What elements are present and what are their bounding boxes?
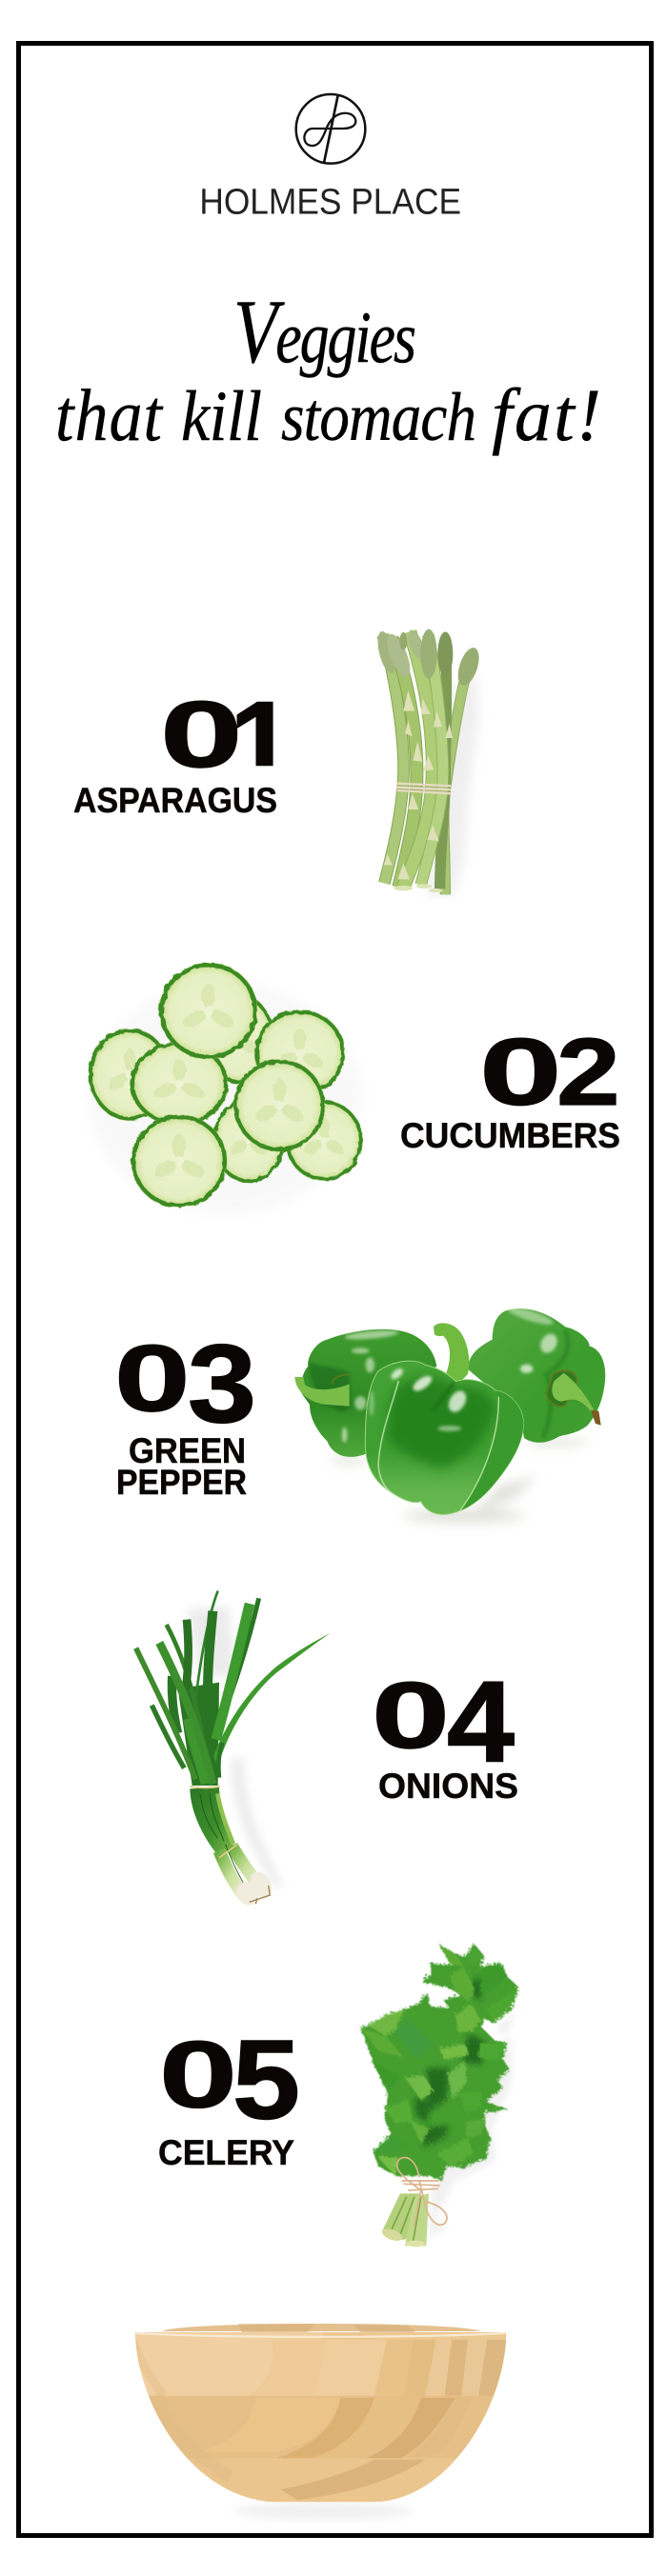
number 04: 4 xyxy=(446,1658,514,1787)
logo: Holmes Place: HOLMES PLACE xyxy=(199,181,461,221)
title: that xyxy=(55,374,163,456)
label: cucumbers: CUCUMBERS xyxy=(400,1116,620,1155)
icon: cucumber slices xyxy=(88,962,364,1209)
number 02 xyxy=(479,1019,620,1126)
label: green pepper: GREEN xyxy=(129,1431,246,1470)
slices xyxy=(89,963,363,1208)
label: asparagus: ASPARAGUS xyxy=(73,781,277,820)
bowl body xyxy=(128,2329,515,2508)
logo: Holmes Place xyxy=(199,93,461,221)
pepper right xyxy=(469,1304,605,1443)
number 03: 0 xyxy=(114,1326,191,1431)
icon: celery bunch xyxy=(358,1943,520,2247)
pepper left xyxy=(294,1328,436,1457)
twine xyxy=(396,2158,447,2226)
number 02: 0 xyxy=(479,1019,561,1125)
title: stomach xyxy=(281,379,476,455)
panel: 03 green pepper xyxy=(114,1307,606,1528)
number 01: 0 xyxy=(160,682,242,788)
foliage xyxy=(359,1942,517,2179)
label: green pepper xyxy=(116,1431,247,1502)
number 03 xyxy=(114,1322,256,1447)
panel: 04 onions xyxy=(133,1590,518,1905)
icon: asparagus bunch xyxy=(377,629,479,895)
number 05: 0 xyxy=(159,2022,237,2127)
title: kill xyxy=(181,377,262,456)
number 01: 1 xyxy=(230,678,293,806)
title xyxy=(55,281,601,456)
number 05: 5 xyxy=(232,2018,300,2143)
label: onions: ONIONS xyxy=(378,1767,518,1806)
number 03: 3 xyxy=(187,1322,256,1447)
icon: spring onions xyxy=(133,1590,330,1905)
pepper center xyxy=(365,1323,523,1514)
number 04: 0 xyxy=(372,1663,450,1768)
number 05 xyxy=(159,2018,300,2143)
shadows xyxy=(331,1439,588,1523)
title: Veggies xyxy=(233,281,416,382)
icon: wooden bowl xyxy=(135,2324,507,2519)
panel: 02 cucumbers xyxy=(88,962,620,1209)
bowl shadow xyxy=(234,2503,413,2520)
label: celery: CELERY xyxy=(158,2133,294,2172)
stalks xyxy=(380,2193,429,2247)
label: green pepper: PEPPER xyxy=(116,1463,247,1502)
icon: green peppers xyxy=(294,1307,606,1528)
number 04 xyxy=(372,1658,515,1787)
title: fat! xyxy=(492,373,601,456)
number 02: 2 xyxy=(556,1019,620,1126)
bowl inside rim xyxy=(162,2324,480,2331)
panel: 01 asparagus xyxy=(73,629,479,895)
panel: 05 celery xyxy=(158,1943,520,2247)
